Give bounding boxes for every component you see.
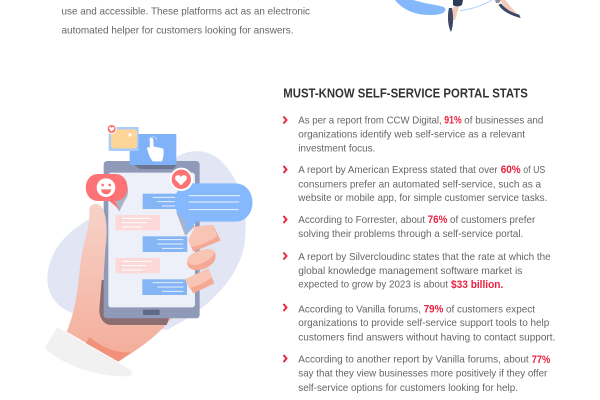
stat 1 [298,114,544,154]
stat 2 [297,164,547,204]
heart badge [170,168,193,191]
stat 1: 91% [444,114,462,126]
cuff shadow [86,337,131,362]
stat 3: According to Forrester, about [298,215,425,226]
thumb [83,204,107,280]
fingers [185,225,221,293]
intro text: use and accessible. These platforms act as an electronic [62,6,310,18]
photo card with heart badge [107,124,139,151]
stat 1: organizations identify web self-service as a relevant [298,129,525,140]
intro text: automated helper for customers looking for answers. [62,26,294,36]
background blob [47,151,246,330]
stat 6: self-service options for customers looking for help. [298,383,518,394]
stat 4: $33 billion. [451,279,503,291]
hand palm [67,204,172,362]
phone body [104,161,200,318]
chevron bullets [284,116,286,362]
stat 5: 79% [424,304,443,316]
stat 4: global knowledge management software market is [298,266,522,277]
stat 4: A report by Silvercloudinc states that the rate at which the [298,252,551,263]
stat 5: of customers expect [446,304,535,315]
chat messages [115,194,187,295]
stat 5: customers find answers without having to contact support. [298,332,555,343]
stat 4 [298,252,551,291]
stat 4: expected to grow by 2023 is about [298,280,448,291]
stat 5 [298,304,555,343]
stat 5: organizations to provide self-service support tools to help [298,318,550,329]
heading: MUST-KNOW SELF-SERVICE PORTAL STATS [283,87,528,101]
stat 6: 77% [532,354,550,366]
stat 6: say that they view businesses more positively if they offer [298,369,548,380]
stat 2: 60% [501,164,521,176]
sleeve [45,327,132,376]
stat 3 [298,214,536,240]
stat 5: According to Vanilla forums, [298,304,421,315]
illustration: hand holding phone [45,124,252,376]
phone shadow [99,280,173,325]
stat 2: website or mobile app, for simple customer service tasks. [297,193,547,204]
stat 1: of businesses and [464,115,544,126]
stat 2: of US [523,165,545,176]
intro text [62,6,310,36]
tap card with pointer icon [130,134,177,169]
stat 3: 76% [428,214,447,226]
stat 2: A report by American Express stated that over [298,165,498,176]
large blue speech bubble [175,183,252,236]
stat 3: solving their problems through a self-service portal. [298,229,523,240]
stat 3: of customers prefer [450,215,536,226]
stat 2: consumers prefer an automated self-service, such as a [298,179,541,190]
stat 6: According to another report by Vanilla forums, about [298,355,529,366]
phone screen [108,173,195,307]
phone home button [143,310,160,315]
illustration: figure legs cropped at top [395,0,520,32]
smiley speech bubble [86,174,128,212]
stat 6 [298,354,550,394]
stat 1: investment focus. [298,143,375,154]
stat 1: As per a report from CCW Digital, [298,115,442,126]
